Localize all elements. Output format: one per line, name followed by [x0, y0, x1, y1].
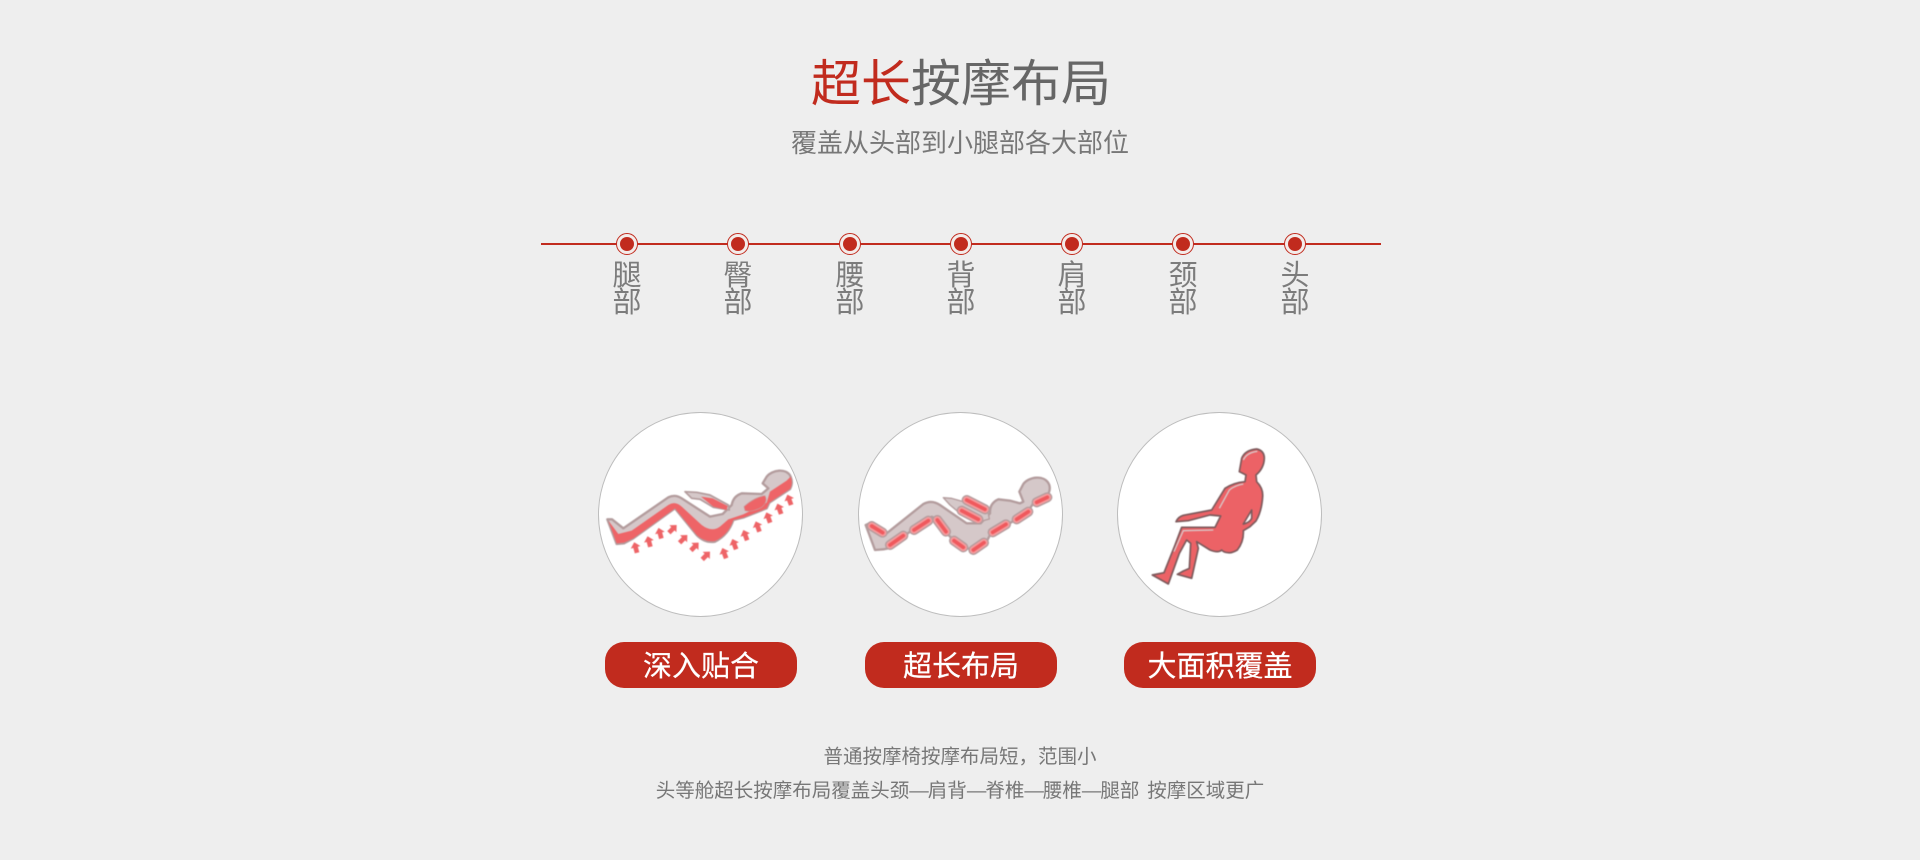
label: 头部: 部 — [1280, 287, 1310, 319]
panel: 大面积覆盖 circle — [1117, 412, 1322, 617]
label: 背部: 背 — [946, 260, 976, 292]
title: 超长按摩布局 — [811, 56, 1111, 112]
label: 颈部 — [1168, 260, 1198, 319]
timeline marker: 颈部 — [1172, 233, 1194, 255]
timeline marker: 臀部 — [727, 233, 749, 255]
icon: seated body fully covered — [1151, 448, 1266, 586]
timeline marker: 腿部 — [616, 233, 638, 255]
label: 臀部 — [723, 260, 752, 319]
label: 颈部: 颈 — [1168, 260, 1198, 292]
timeline marker: 头部 — [1284, 233, 1306, 255]
button: 大面积覆盖: 大面积覆盖 — [1147, 651, 1292, 683]
label: 腿部: 腿 — [612, 260, 642, 292]
button: 超长布局: 超长布局 — [903, 651, 1019, 683]
label: 臀部: 臀 — [723, 260, 752, 292]
icon: reclining body with arrows — [606, 469, 794, 562]
label: 肩部: 肩 — [1057, 260, 1086, 292]
button: 深入贴合: 深入贴合 — [643, 651, 759, 683]
timeline line — [541, 243, 1381, 245]
button: 超长布局 — [865, 642, 1057, 688]
label: 颈部: 部 — [1168, 287, 1198, 319]
timeline marker: 背部 — [950, 233, 972, 255]
timeline — [541, 243, 1381, 245]
subtitle: 覆盖从头部到小腿部各大部位 — [791, 128, 1129, 158]
icon: reclining body with massage pads — [864, 476, 1053, 556]
label: 头部 — [1280, 260, 1310, 319]
label: 臀部: 部 — [723, 287, 752, 319]
label: 背部 — [946, 260, 976, 319]
description line 2: 头等舱超长按摩布局覆盖头颈—肩背—脊椎—腰椎—腿部 按摩区域更广 — [656, 780, 1264, 802]
description line 1: 普通按摩椅按摩布局短，范围小 — [823, 746, 1096, 768]
label: 腿部: 部 — [612, 287, 642, 319]
label: 头部: 头 — [1280, 260, 1310, 292]
label: 背部: 部 — [946, 287, 976, 319]
button: 深入贴合 — [605, 642, 797, 688]
timeline marker: 肩部 — [1061, 233, 1083, 255]
label: 腿部 — [612, 260, 642, 319]
panel: 深入贴合 circle — [598, 412, 803, 617]
timeline marker: 腰部 — [839, 233, 861, 255]
label: 腰部 — [835, 260, 864, 319]
label: 腰部: 腰 — [835, 260, 864, 292]
label: 腰部: 部 — [835, 287, 864, 319]
label: 肩部 — [1057, 260, 1086, 319]
button: 大面积覆盖 — [1124, 642, 1316, 688]
label: 肩部: 部 — [1057, 287, 1086, 319]
panel: 超长布局 circle — [858, 412, 1063, 617]
